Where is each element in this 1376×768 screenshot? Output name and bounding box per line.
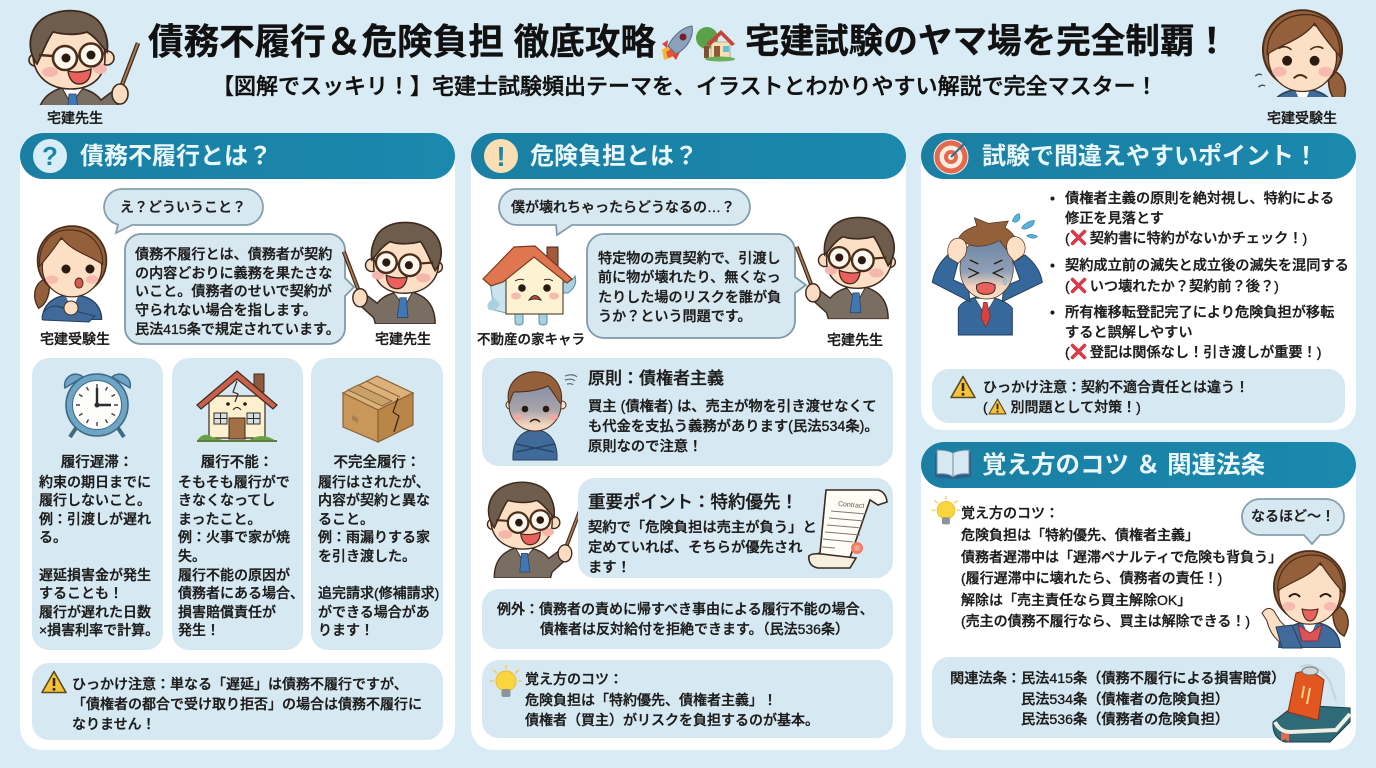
text: 原則 [588,398,879,455]
speech bubble: definition: 前に物が壊れたり、無くなっ [598,269,781,285]
text: warning [72,676,422,732]
callout: ひっかけ注意 [32,663,443,740]
text: 重要ポイント [588,519,817,576]
text: 履行遅滞: 例：引渡しが遅れ [39,511,151,527]
text: コツ: 覚え方のコツ： [525,671,623,687]
icon: damaged box [342,375,414,443]
heading: 覚え方のコツ＆関連法条: 覚え方のコツ ＆ 関連法条 [982,452,1265,479]
text: 関連法条: 民法536条（債務者の危険負担） [1021,712,1229,728]
text: 履行遅滞: る。 [39,529,67,545]
label: house character: 不動産の家キャラ [477,332,585,347]
panel: 覚え方のコツ＆関連法条 [921,442,1356,750]
text: 関連法条: 関連法条：民法415条（債務不履行による損害賠償） [950,671,1285,687]
heading: 債務不履行とは: 債務不履行とは？ [80,143,272,170]
icon: warning [950,376,976,398]
text: 不完全履行: を引き渡した。 [318,548,416,564]
icon: teacher, top left [28,10,140,105]
text: line group 2: 解除は「売主責任なら買主解除OK」 [961,592,1191,608]
text: line group 2 [961,592,1250,630]
icon: worried boy [506,371,578,460]
icon: cracked house [196,370,278,442]
text: 関連法条: 民法534条（債権者の危険負担） [1021,692,1229,708]
speech bubble: definition: 民法415条で規定されています。 [135,321,340,337]
speech bubble: house question: 僕が壊れちゃったらどうなるの…？ [511,199,735,215]
text: 不完全履行: 履行はされたが、 [318,474,430,490]
bullet 1: ( 契約書に特約がないかチェック！) [1065,231,1307,247]
icon: house with tree [696,27,735,62]
bullet 3: 所有権移転登記完了により危険負担が移転 [1065,305,1334,321]
text: 不完全履行: 不完全履行： [334,455,420,471]
text: 履行遅滞: することも！ [39,585,123,601]
callout: ひっかけ注意 [932,369,1345,423]
text: warning: ひっかけ注意：単なる「遅延」は債務不履行ですが、 [72,676,408,692]
text: 履行不能 [178,454,304,638]
icon: light bulb [490,665,522,697]
text: line group 1: 覚え方のコツ： [961,505,1059,521]
bullet 2: 契約成立前の滅失と成立後の滅失を混同する [1065,258,1349,274]
text: warning: なりません！ [72,716,156,732]
text: 履行不能: 履行不能の原因が [178,567,290,583]
card: 覚え方のコツ [482,660,893,738]
icon: house character [482,245,576,326]
card: 重要ポイント [578,478,893,578]
text: 履行遅滞: 遅延損害金が発生 [39,567,151,583]
card: 不完全履行 [311,358,443,650]
heading: 危険負担とは: 危険負担とは？ [530,143,698,170]
speech bubble: definition: いこと。債務者のせいで契約が [135,283,332,299]
icon: omamori on book [1270,663,1354,743]
text: 履行不能: まったこと。 [178,511,261,527]
text: line group 2: (売主の債務不履行なら、買主は解除できる！) [961,613,1250,629]
heading: 債務不履行とは [20,133,455,179]
card: 関連法条 [932,657,1345,738]
speech bubble: student question [103,188,264,234]
text: 重要ポイント: 定めていれば、そちらが優先され [588,540,802,556]
bullet 2: • [1050,258,1055,274]
card: 例外 [482,589,893,649]
text: 原則: 原則なので注意！ [588,439,702,455]
label: teacher: 宅建先生 [375,331,431,347]
text: 履行遅滞: 約束の期日までに [39,474,151,490]
text: 履行不能: 損害賠償責任が [178,604,276,620]
text: 不完全履行: ること。 [318,511,374,527]
text: 重要ポイント: ます！ [588,560,631,576]
speech bubble: definition: 守られない場合を指します。 [135,302,317,318]
text: line group 1: 危険負担は「特約優先、債権者主義」 [961,527,1199,543]
text: 不完全履行: 内容が契約と異な [318,492,430,508]
text: 不完全履行: 例：雨漏りする家 [318,529,430,545]
heading: 覚え方のコツ＆関連法条 [921,442,1356,488]
text: 履行遅滞 [39,454,159,638]
speech bubble: definition [124,233,356,345]
text: 原則: も代金を支払う義務があります(民法534条)。 [588,419,879,435]
card: 原則 [482,358,893,466]
text: コツ: 債権者（買主）がリスクを負担するのが基本。 [525,712,819,728]
heading: 間違えやすいポイント [921,133,1356,179]
text: 履行不能: 例：火事で家が焼 [178,529,290,545]
text: コツ: 危険負担は「特約優先、債権者主義」！ [525,692,777,708]
text: 関連法条 [950,669,1285,730]
bullet 3: すると誤解しやすい [1065,325,1193,341]
icon: warning [41,670,67,694]
text: コツ [525,671,819,728]
speech bubble: definition: 特定物の売買契約で、引渡し [598,250,781,266]
list: common mistakes [1050,190,1349,361]
panel: 危険負担とは [471,133,906,750]
icon: contract scroll: Contract [838,501,865,510]
text: warning: 「債権者の都合で受け取り拒否」の場合は債務不履行に [72,696,422,712]
text: 例外: 債権者は反対給付を拒絶できます。（民法536条） [540,621,849,637]
text: 不完全履行: ができる場合があ [318,604,430,620]
text: 履行不能: きなくなってし [178,492,275,508]
bullet 2: ( いつ壊れたか？契約前？後？) [1065,279,1279,295]
text: 履行遅滞: 履行しないこと。 [39,492,151,508]
icon: teacher [342,222,444,324]
text: line group 1 [961,505,1282,586]
text: 履行不能: 履行不能： [201,455,273,471]
speech bubble: definition: うか？という問題です。 [598,308,752,324]
card: 履行遅滞 [32,358,163,650]
icon: rocket [662,26,693,60]
heading: 債務不履行とは: ? [42,141,58,171]
text: 原則: 買主 (債権者) は、売主が物を引き渡せなくて [588,399,877,415]
text: 履行不能: 債務者にある場合、 [178,585,304,601]
text: 例外 [497,601,874,637]
bullet 3: • [1050,305,1055,321]
icon: student, top right [1254,9,1346,97]
title continued: 宅建試験のヤマ場を完全制覇！ [745,23,1229,61]
speech bubble: house question [498,188,751,236]
text: line group 1: (履行遅滞中に壊れたら、債務者の責任！) [961,570,1222,586]
speech bubble: definition: たりした場のリスクを誰が負 [598,289,781,305]
bullet 3 [1050,304,1334,361]
text: 履行不能: 失。 [178,548,206,564]
text: warning: ( 別問題として対策！) [983,399,1141,415]
label: teacher: 宅建先生 [47,110,103,126]
text: 不完全履行: 追完請求(修補請求) [318,585,439,601]
speech bubble: definition [586,233,808,339]
text: 例外: 例外：債務者の責めに帰すべき事由による履行不能の場合、 [497,601,874,617]
speech bubble: なるほど [1241,498,1345,546]
bullet 1 [1050,190,1334,247]
icon: light bulb [932,496,960,524]
icon: teacher [486,482,578,578]
text: warning: ひっかけ注意：契約不適合責任とは違う！ [983,379,1249,395]
subtitle: 【図解でスッキリ！】宅建士試験頻出テーマを、イラストとわかりやすい解説で完全マスター！ [212,74,1158,99]
icon: teacher [795,216,896,320]
card: 履行不能 [172,358,303,650]
text: 不完全履行 [318,454,439,638]
panel: 債務不履行とは [20,133,455,750]
icon: contract scroll [808,489,888,569]
bullet 1: • [1050,191,1055,207]
label: teacher: 宅建先生 [827,332,883,348]
title: 債務不履行＆危険負担 徹底攻略 [148,22,656,62]
speech bubble: なるほど: なるほど～！ [1251,508,1335,524]
text: 履行不能: 発生！ [178,622,220,638]
panel: 試験で間違えやすいポイント [921,133,1356,430]
text: 履行遅滞: 履行遅滞： [61,455,133,471]
text: 不完全履行: ります！ [318,622,374,638]
speech bubble: student question: え？どういうこと？ [120,199,246,215]
heading: 重要ポイント: 重要ポイント：特約優先！ [588,492,798,512]
text: コツ [961,505,1282,630]
text: 重要ポイント: 契約で「危険負担は売主が負う」と [588,520,817,536]
icon: alarm clock [64,373,132,438]
text: 履行遅滞: 履行が遅れた日数 [39,604,151,620]
heading: 原則: 原則：債権者主義 [588,369,724,388]
heading: 危険負担とは [471,133,906,179]
bullet 1: 修正を見落とす [1065,211,1164,227]
text: line group 1: 債務者遅滞中は「遅滞ペナルティで危険も背負う」 [961,549,1282,565]
icon: happy student [1262,549,1354,648]
bullet 1: 債権者主義の原則を絶対視し、特約による [1065,191,1334,207]
bullet 2 [1050,258,1349,295]
heading: 危険負担とは: ! [496,141,506,172]
heading: 間違えやすいポイント: 試験で間違えやすいポイント！ [982,143,1318,170]
speech bubble: definition: 債務不履行とは、債務者が契約 [135,246,332,262]
text: 履行遅滞: ×損害利率で計算。 [39,622,159,638]
bullet 3: ( 登記は関係なし！引き渡しが重要！) [1065,345,1321,361]
label: student: 宅建受験生 [40,331,110,347]
label: student: 宅建受験生 [1267,110,1337,126]
text: 履行不能: そもそも履行がで [178,474,290,490]
speech bubble: definition: の内容どおりに義務を果たさな [135,265,332,281]
text: warning [983,379,1249,416]
icon: student with arms crossed [34,225,108,322]
icon: stressed man [932,213,1043,336]
